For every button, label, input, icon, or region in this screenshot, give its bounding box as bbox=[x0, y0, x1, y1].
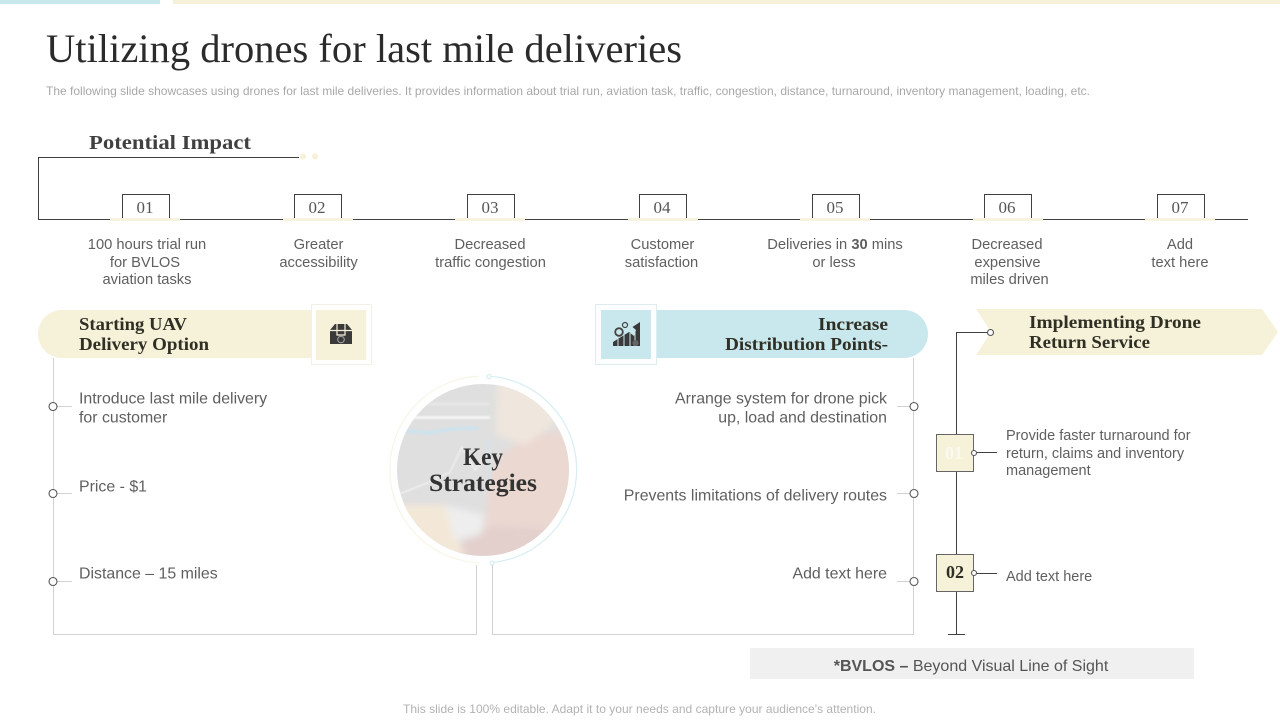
banner heading: Delivery Option bbox=[79, 334, 209, 354]
step box 01 bbox=[936, 434, 997, 472]
step text 02: Add text here bbox=[1006, 569, 1092, 585]
footer note: This slide is 100% editable. Adapt it to your needs and capture your audience's attention. bbox=[403, 702, 876, 716]
step 03: 03 bbox=[482, 198, 498, 217]
panel: starting UAV delivery option bbox=[38, 304, 476, 634]
item: distance bbox=[49, 566, 218, 586]
title: Utilizing drones for last mile deliveries bbox=[46, 26, 682, 71]
step box 02: 02 bbox=[946, 562, 964, 582]
vertical connector bbox=[948, 330, 994, 634]
right bracket lines bbox=[492, 358, 914, 634]
banner heading: Increase bbox=[818, 314, 888, 334]
banner: increase distribution bbox=[656, 310, 928, 358]
item: arrange system bbox=[675, 390, 918, 426]
icon: growth chart with gears bbox=[596, 304, 656, 364]
panel: increase distribution points bbox=[492, 304, 928, 634]
banner: starting UAV bbox=[38, 310, 312, 358]
step 06 bbox=[970, 194, 1049, 288]
step 07: 07 bbox=[1172, 198, 1189, 217]
ribbon heading bbox=[1029, 312, 1201, 352]
step 07: Add bbox=[1167, 237, 1193, 253]
step text 01: management bbox=[1006, 463, 1091, 479]
ring bbox=[390, 374, 577, 565]
top accent bars bbox=[0, 0, 1280, 4]
step text 01: Provide faster turnaround for bbox=[1006, 428, 1191, 444]
step 06: expensive bbox=[974, 255, 1041, 271]
banner heading: Distribution Points- bbox=[725, 334, 888, 354]
ribbon heading: Implementing Drone bbox=[1029, 312, 1201, 332]
timeline connector line bbox=[38, 154, 1248, 220]
item: price: Price - $1 bbox=[79, 478, 147, 496]
banner heading: Starting UAV bbox=[79, 314, 187, 334]
step 07 bbox=[1151, 194, 1209, 271]
heading: potential impact: Potential Impact bbox=[89, 132, 251, 154]
item: arrange system: up, load and destination bbox=[718, 410, 887, 426]
circle label bbox=[429, 444, 537, 497]
step 06: Decreased bbox=[971, 237, 1043, 253]
step 04: satisfaction bbox=[625, 255, 698, 271]
item: prevents limitations: Prevents limitations of delivery routes bbox=[624, 488, 887, 504]
panel: potential impact timeline bbox=[38, 132, 1248, 288]
icon: delivery box bbox=[312, 304, 372, 364]
banner heading bbox=[725, 314, 888, 354]
banner heading bbox=[79, 314, 209, 354]
step box 01: 01 bbox=[945, 443, 963, 463]
step 03: traffic congestion bbox=[435, 255, 546, 271]
step 04 bbox=[625, 194, 698, 271]
circle label: Key bbox=[463, 444, 503, 471]
callout: BVLOS definition bbox=[750, 648, 1194, 679]
item: add text: Add text here bbox=[792, 566, 887, 582]
step 01: 01 bbox=[136, 198, 154, 217]
step 05: or less bbox=[812, 255, 856, 271]
step 07: text here bbox=[1151, 255, 1209, 271]
step box 02 bbox=[936, 554, 997, 592]
step 01 bbox=[88, 194, 206, 288]
subtitle: The following slide showcases using drones for last mile deliveries. It provides information about trial run, aviation task, traffic, congestion, distance, turnaround, inventory management, loading, etc. bbox=[46, 84, 1090, 98]
callout: BVLOS definition: *BVLOS – Beyond Visual Line of Sight bbox=[834, 658, 1109, 675]
step 01: for BVLOS bbox=[110, 255, 180, 271]
step 04: Customer bbox=[631, 237, 694, 253]
step text 01: return, claims and inventory bbox=[1006, 446, 1185, 462]
step 03 bbox=[435, 194, 546, 271]
step 06: 06 bbox=[998, 198, 1016, 217]
step 01: aviation tasks bbox=[102, 272, 192, 288]
step 02: 02 bbox=[308, 198, 326, 217]
item: add text bbox=[792, 566, 918, 586]
ribbon heading: Return Service bbox=[1029, 332, 1150, 352]
step 02 bbox=[279, 194, 358, 271]
item: price bbox=[49, 478, 147, 498]
item: distance: Distance – 15 miles bbox=[79, 566, 218, 582]
step 05: Deliveries in 30 mins bbox=[767, 237, 903, 253]
photo: person with tablet and chart screen bbox=[395, 382, 575, 560]
step 05: 05 bbox=[826, 198, 844, 217]
step 03: Decreased bbox=[454, 237, 526, 253]
step 02: accessibility bbox=[279, 255, 358, 271]
circle label: Strategies bbox=[429, 470, 537, 497]
item: introduce last mile delivery: Introduce last mile delivery bbox=[79, 390, 267, 408]
step 05 bbox=[767, 194, 903, 271]
panel: implementing drone return service bbox=[936, 309, 1278, 634]
step 06: miles driven bbox=[970, 272, 1049, 288]
step 01: 100 hours trial run bbox=[88, 237, 206, 253]
step 02: Greater bbox=[294, 237, 344, 253]
left bracket lines bbox=[54, 358, 476, 634]
item: introduce last mile delivery: for customer bbox=[79, 410, 168, 426]
ribbon banner bbox=[976, 309, 1278, 355]
item: introduce last mile delivery bbox=[49, 390, 267, 426]
step 04: 04 bbox=[654, 198, 671, 217]
key strategies circle bbox=[390, 374, 577, 565]
item: arrange system: Arrange system for drone pick bbox=[675, 390, 887, 408]
